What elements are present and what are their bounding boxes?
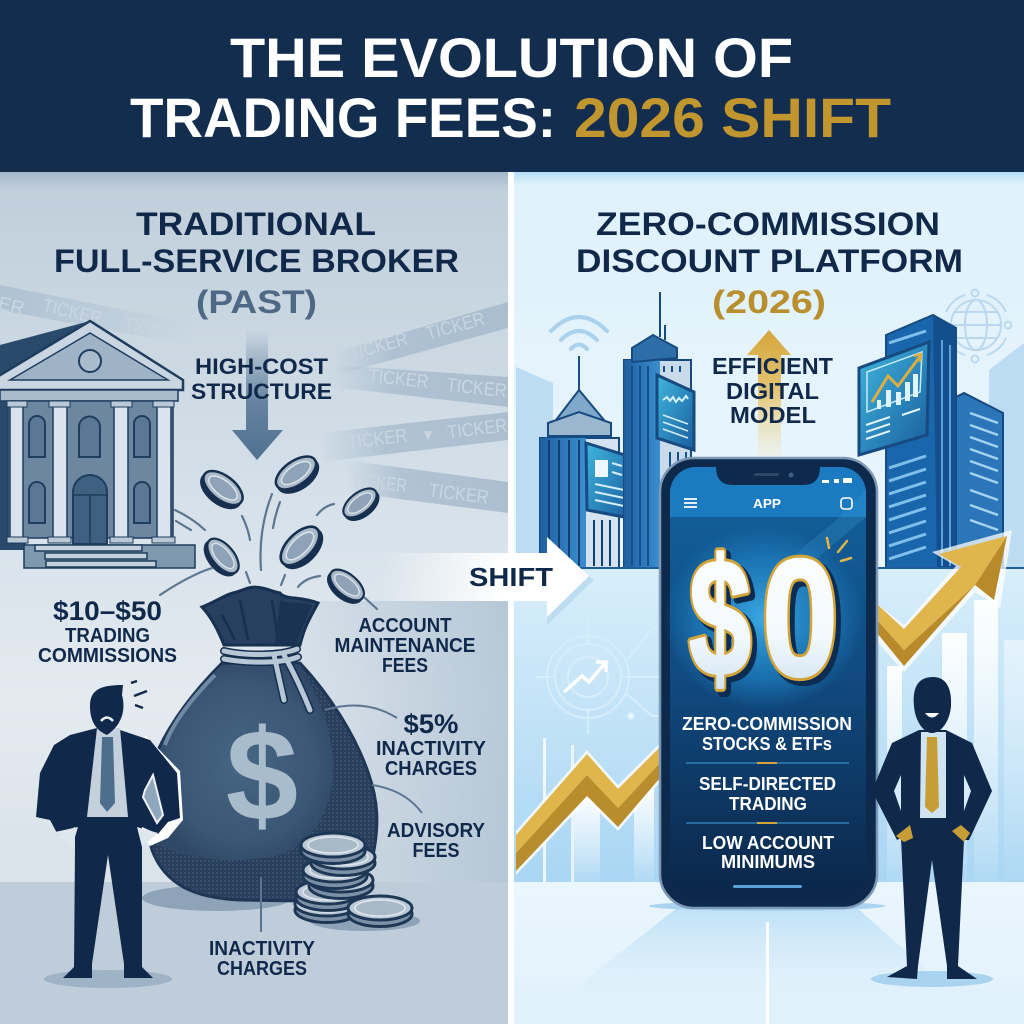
building: centre tower xyxy=(624,292,694,568)
icon: coin stack xyxy=(295,833,420,931)
title line 2 xyxy=(130,86,891,149)
left heading: FULL-SERVICE BROKER xyxy=(54,243,459,279)
arrow: gold growth line left xyxy=(516,743,660,875)
ticker labels: TICKER xyxy=(446,415,508,444)
ticker labels: TICKER xyxy=(351,470,408,497)
label: inactivity charges $5%: CHARGES xyxy=(385,758,477,780)
title line 2: TRADING FEES: xyxy=(130,86,556,149)
chart: bars background xyxy=(543,600,1024,882)
arrow: down xyxy=(232,330,283,460)
phone feature text: ZERO-COMMISSION xyxy=(682,714,852,734)
right heading: (2026) xyxy=(712,284,826,320)
home bar xyxy=(733,885,802,888)
building: right towers xyxy=(859,315,1003,568)
ticker labels: TICKER xyxy=(446,375,508,402)
app bar xyxy=(670,467,866,517)
zero dollar figure: $ xyxy=(689,526,751,711)
label: efficient digital model: EFFICIENT xyxy=(712,353,833,379)
ticker labels: TICKER xyxy=(347,329,410,365)
app bar icons xyxy=(684,496,852,511)
label: inactivity charges bottom xyxy=(209,938,316,980)
phone feature text: MINIMUMS xyxy=(721,852,815,872)
panel: traditional broker background xyxy=(0,172,508,1024)
app bar icons: APP xyxy=(753,496,781,511)
zero dollar figure: $ xyxy=(693,530,755,715)
icon: growth target circle xyxy=(537,620,660,734)
arrow: gold growth line right xyxy=(872,530,1012,672)
dividers xyxy=(686,763,849,823)
phone feature text xyxy=(682,714,852,872)
figure: happy businessman xyxy=(871,677,993,987)
label: high-cost structure xyxy=(191,330,332,460)
left heading: TRADITIONAL xyxy=(136,206,376,242)
zero dollar figure: 0 xyxy=(762,526,838,711)
right heading: DISCOUNT PLATFORM xyxy=(576,243,963,279)
divider accents xyxy=(757,763,777,823)
zero dollar figure xyxy=(689,526,842,715)
right heading xyxy=(576,206,963,320)
label: trading commissions: $10–$50 xyxy=(53,596,162,626)
status icons xyxy=(822,478,852,483)
icon: money bag xyxy=(142,587,377,911)
ticker labels: ▼ xyxy=(421,427,435,444)
phone feature text: LOW ACCOUNT xyxy=(702,833,834,853)
arrow: up gold xyxy=(747,330,791,456)
label: inactivity charges $5%: $5% xyxy=(404,709,458,739)
label: high-cost structure: STRUCTURE xyxy=(191,379,332,404)
ticker labels: TICKER xyxy=(424,309,487,345)
sparkle xyxy=(827,538,851,561)
title line 2: 2026 SHIFT xyxy=(574,86,891,149)
ticker labels xyxy=(0,293,508,509)
label: advisory fees: ADVISORY xyxy=(387,820,486,842)
label: advisory fees: FEES xyxy=(412,840,460,862)
highlight xyxy=(788,490,866,560)
label: inactivity charges bottom: INACTIVITY xyxy=(209,938,316,960)
title line 1: THE EVOLUTION OF xyxy=(230,26,793,89)
label: high-cost structure: HIGH-COST xyxy=(195,354,329,379)
figure: unhappy businessman xyxy=(36,681,183,988)
label: inactivity charges bottom: CHARGES xyxy=(217,958,307,980)
panel: discount platform background xyxy=(514,172,1024,1024)
label: trading commissions: COMMISSIONS xyxy=(38,645,177,667)
label: trading commissions: TRADING xyxy=(65,625,150,647)
zero dollar figure: $ xyxy=(689,526,751,711)
label: efficient digital model: MODEL xyxy=(730,402,816,428)
connector lines xyxy=(261,706,422,932)
centre divider xyxy=(508,172,514,1024)
ticker labels: TICKER xyxy=(368,366,430,393)
label: advisory fees xyxy=(387,820,486,862)
label: account maintenance fees xyxy=(334,615,476,677)
phone feature text: STOCKS & ETFs xyxy=(702,734,832,754)
phone notch xyxy=(716,467,820,485)
glow xyxy=(664,526,864,710)
ticker labels: TICKER xyxy=(122,314,185,348)
icon: bank building xyxy=(0,321,195,568)
label: efficient digital model: DIGITAL xyxy=(726,378,819,404)
label: account maintenance fees: MAINTENANCE xyxy=(334,635,476,657)
header band xyxy=(0,0,1024,172)
zero dollar figure: 0 xyxy=(766,530,842,715)
label: trading commissions xyxy=(38,596,177,667)
left heading: (PAST) xyxy=(196,284,317,320)
label: account maintenance fees: FEES xyxy=(382,655,428,677)
dollar sign on bag: $ xyxy=(226,702,298,848)
icon: wifi xyxy=(551,317,607,349)
label: efficient digital model xyxy=(712,353,833,428)
phone feature text: SELF-DIRECTED xyxy=(699,774,836,794)
arrow: shift xyxy=(380,537,594,625)
notch details xyxy=(754,472,794,478)
ticker ribbons xyxy=(0,285,508,513)
left heading xyxy=(54,206,459,320)
icon: globe xyxy=(946,290,1012,362)
ticker labels: TICKER xyxy=(41,296,104,330)
phone xyxy=(649,458,885,911)
phone feature text: TRADING xyxy=(729,794,807,814)
city: skyline background xyxy=(516,343,1024,568)
label: inactivity charges $5% xyxy=(376,709,487,780)
ticker labels: TICKER xyxy=(346,425,408,454)
icon: falling coins xyxy=(160,449,385,610)
horizon line xyxy=(514,567,1024,569)
label: account maintenance fees: ACCOUNT xyxy=(358,615,452,637)
zero dollar figure: 0 xyxy=(762,526,838,711)
building: left tower xyxy=(540,356,631,568)
arrow: shift: SHIFT xyxy=(469,562,553,592)
right heading: ZERO-COMMISSION xyxy=(596,206,940,242)
ticker labels: TICKER xyxy=(428,480,490,509)
label: inactivity charges $5%: INACTIVITY xyxy=(376,738,487,760)
